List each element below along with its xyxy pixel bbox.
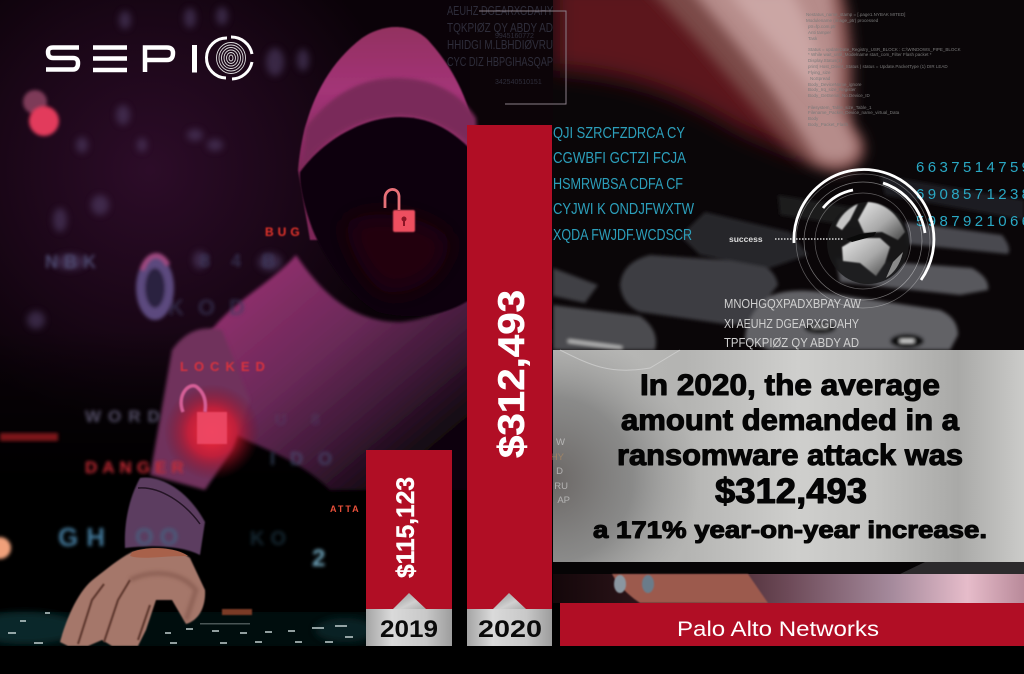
white code text over keys [724, 297, 861, 350]
source bar: Palo Alto Networks: Palo Alto Networks [677, 618, 879, 641]
body of the hacker [205, 27, 553, 490]
background photo: hooded hacker [0, 0, 553, 646]
bar value 2020: $312,493 [491, 290, 532, 458]
cyan scrolling code text: QJI SZRCFZDRCA CY [553, 125, 685, 142]
blurred digital letters [45, 251, 337, 572]
bar: 2020 [467, 125, 552, 646]
blurred digital letters: NBK [45, 252, 102, 272]
panel: headline stat [551, 350, 1024, 562]
small white console text: Body_DeviceName_ignore [808, 82, 862, 87]
cyan scrolling code text: CGWBFI GCTZI FCJA [553, 150, 687, 167]
blurred digital letters: U 8 [275, 412, 330, 429]
ghost code frame [479, 11, 566, 104]
small white console text: Modulename (image_ptr) processed [806, 18, 879, 23]
heading text: In 2020, the average [640, 369, 940, 402]
small white console text: ptr=fp.com.ptr [808, 24, 836, 29]
blurred digital letters: 8 4 B [200, 251, 283, 271]
bar: 2019 [366, 450, 452, 646]
ghosted code panel at top: TQKPIØZ QY ABDY AD [447, 21, 553, 35]
ghosted code panel at top: 9945160772 [495, 33, 534, 40]
cyan scrolling code text: CYJWI K ONDJFWXTW [553, 201, 694, 218]
small white console text: Nestatus_name_stamp = [.page1.NYBAK MITED] [806, 12, 905, 17]
blurred digital letters: 2 [312, 545, 325, 572]
bar value 2019: $115,123 [392, 477, 420, 578]
ghosted code on panel: AP [557, 495, 570, 506]
small white console text: NoSpread [810, 76, 831, 81]
small white console text: Anti tamper [808, 30, 832, 35]
icon: globe with rings: success [729, 234, 763, 244]
red glowing accents: BUG [265, 225, 304, 239]
small white console text: Filename_Packet_Device_name_virtual_Data [808, 110, 900, 115]
small white console text: Body_GetSerial_No.Device_ID [808, 93, 871, 98]
small white console text: Flying_size [808, 70, 831, 75]
ghosted code on panel: HY [551, 452, 565, 463]
ghosted code panel at top [447, 4, 553, 86]
blurred digital letters: WORD [85, 407, 167, 426]
small white console text: Status = updateDate_Registry_USR_BLOCK : C:\WINDOWS_PIPE_BLOCK [808, 47, 961, 52]
small white console text [806, 12, 961, 127]
ghosted code on panel: RU [554, 481, 568, 492]
small white console text: * While wait_until_Modelname start_com_Filter Flash packet * [808, 52, 932, 57]
small white console text: Body [808, 116, 819, 121]
cyan scrolling code text: HSMRWBSA CDFA CF [553, 176, 683, 193]
year label 2020: 2020 [478, 616, 542, 643]
icon: red open padlock [385, 189, 415, 232]
heading text: $312,493 [715, 472, 867, 511]
background photo strip under the panel [553, 562, 1024, 603]
year label 2019: 2019 [380, 616, 438, 643]
white code text over keys: MNOHGQXPADXBPAY AW [724, 297, 861, 311]
blurred digital letters: KOD [168, 295, 259, 320]
ghost fingerprint oval [136, 256, 174, 320]
ghosted code on panel [551, 437, 570, 506]
red glowing accents: DANGER [85, 458, 189, 477]
ghosted code panel at top: HHIDGI M.LBHDIØVRU [447, 38, 553, 52]
blurred digital letters: GH [58, 522, 113, 552]
red glowing accents: ATTA [330, 504, 361, 514]
background photo: keyboard and hand [553, 0, 1024, 350]
heading text [593, 369, 987, 544]
logo: SEPIO [46, 37, 252, 79]
red glowing accents [0, 90, 361, 615]
white code text over keys: XI AEUHZ DGEARXGDAHY [724, 317, 860, 331]
ghosted code on panel: D [556, 466, 563, 477]
ghosted code panel at top: AEUHZ DGEARXGDAHY [447, 4, 553, 18]
small white console text: Display.Status(1) [808, 58, 842, 63]
hand and keyboard [0, 548, 375, 646]
small white console text: Body_Irq_size_Register [808, 87, 856, 92]
small white console text: Task [808, 36, 818, 41]
small white console text: Body_Packet_Flash [808, 122, 849, 127]
hood [298, 27, 480, 240]
blurred digital letters: OO [135, 524, 184, 551]
cyan number rows [916, 162, 1024, 226]
cyan scrolling code text: XQDA FWJDF.WCDSCR [553, 227, 692, 244]
cyan scrolling code text [553, 125, 694, 244]
heading text: ransomware attack was [617, 439, 963, 472]
face shadow [300, 117, 480, 316]
ghosted code panel at top: 342540510151 [495, 79, 542, 86]
source bar: Palo Alto Networks [560, 603, 1024, 646]
icon: globe with rings [729, 169, 934, 308]
icon: fingerprint [216, 42, 246, 74]
heading text: a 171% year-on-year increase. [593, 517, 987, 544]
red glowing accents: LOCKED [180, 359, 271, 374]
ghosted code panel at top: CYC DIZ HBPGIHASQAP [447, 55, 553, 69]
heading text: amount demanded in a [621, 404, 959, 437]
small white console text: print( Host_Driver_Status ) status = Update.PacketType (1) DIR LEAD [808, 64, 948, 69]
keyboard keys [553, 175, 1024, 350]
ghosted code on panel: W [556, 437, 565, 448]
blurred digital letters: KO [250, 528, 292, 550]
small white console text: Filesystem_Table_size_Table_1 [808, 105, 872, 110]
arm and cuff [125, 328, 250, 555]
blurred digital letters: I D O [270, 449, 337, 469]
white code text over keys: TPFQKPIØZ QY ABDY AD [724, 336, 859, 350]
